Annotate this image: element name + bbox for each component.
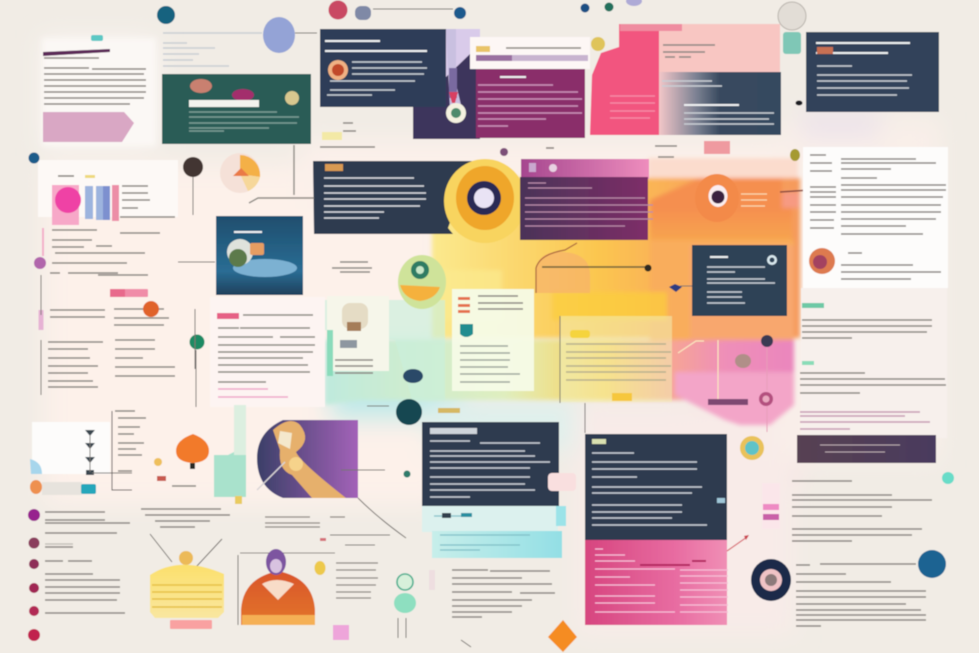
icon: small dark node xyxy=(367,369,460,478)
panel: stacked coins icon xyxy=(778,2,806,54)
panel: navy middle card xyxy=(422,422,576,558)
pink tail xyxy=(675,372,794,425)
icon: orange balloon xyxy=(154,434,209,486)
tab: pale pink xyxy=(548,473,576,491)
node: lavender balloon xyxy=(263,17,295,53)
panel: green card xyxy=(162,74,311,144)
node markers left xyxy=(28,152,203,269)
icon: orange diamond xyxy=(548,620,577,652)
panel: large left-hand chart card xyxy=(38,160,178,256)
panel: navy lower card xyxy=(585,434,749,625)
bar chart xyxy=(85,186,109,220)
icon: ringed teal node xyxy=(708,335,773,460)
arrow: pointer xyxy=(669,284,682,292)
bullet list markers xyxy=(28,509,40,641)
low gradient band xyxy=(325,340,794,405)
icon: pie chart xyxy=(220,153,260,193)
panel: warm gradient area xyxy=(325,158,800,425)
icon: colored blob xyxy=(809,248,835,274)
panel: dark speech card xyxy=(313,161,472,234)
panel: lower-right text column xyxy=(797,288,947,463)
yellow patch xyxy=(552,292,667,320)
text lines xyxy=(44,58,146,104)
panel: light pink top xyxy=(659,24,780,72)
icon: dome and arrow xyxy=(536,243,652,293)
panel: purple gradient card xyxy=(520,159,653,240)
panel: pink lower card xyxy=(585,540,727,625)
connector lines xyxy=(678,340,718,400)
text lines xyxy=(500,76,526,78)
panel: person with orange body xyxy=(238,549,335,625)
panel: teal band xyxy=(422,506,558,532)
bottom-left text list xyxy=(45,512,130,613)
panel: pink block xyxy=(590,24,781,135)
dot xyxy=(796,100,802,106)
tag: pink label xyxy=(500,141,730,157)
panel: lower-right note xyxy=(762,481,932,541)
heading bar xyxy=(43,49,110,56)
text lines xyxy=(325,41,427,51)
shape: mint bar xyxy=(214,405,246,504)
badge: teal tag xyxy=(91,35,103,41)
panel: funnel list xyxy=(30,411,146,495)
panel: pink-edged article xyxy=(210,297,325,407)
panel: mint wash with centre cards xyxy=(324,289,672,433)
pink arrow banner xyxy=(43,112,134,142)
panel: centre-top note xyxy=(163,17,317,66)
panel: top-left text card xyxy=(42,35,156,146)
panel: navy small card xyxy=(669,245,787,316)
panel: yellow stack xyxy=(141,509,230,629)
icon: green round node xyxy=(332,255,446,309)
icon: ring xyxy=(446,103,466,123)
panel: navy right card xyxy=(796,32,939,112)
panel: left text column xyxy=(41,263,204,407)
icon: orange eye xyxy=(695,174,810,222)
lavender strip xyxy=(446,29,480,139)
panel: navy fade xyxy=(659,72,781,135)
icon: teal dot xyxy=(942,472,954,484)
icon: target yellow xyxy=(444,159,526,243)
icon: yellow cluster xyxy=(591,37,605,51)
panel: blue image xyxy=(178,216,303,295)
card: mint note xyxy=(327,296,389,371)
arrow: red xyxy=(727,537,747,551)
icon: bowl xyxy=(190,79,212,93)
icon: orange disc xyxy=(328,60,348,80)
icon: olive dot xyxy=(790,149,800,161)
panel: white text card right xyxy=(803,147,948,288)
panel: navy violet card xyxy=(320,29,480,139)
icon: pink blob xyxy=(52,185,79,225)
panel: bottom mid text xyxy=(452,570,577,652)
panel: magenta card xyxy=(470,37,605,138)
text lines xyxy=(189,112,299,131)
icon: mint nodes xyxy=(394,574,471,647)
tag: pink xyxy=(110,289,148,297)
panel: violet image xyxy=(257,420,385,498)
panel: bottom centre notes xyxy=(265,498,435,640)
card: white middle xyxy=(452,289,534,391)
panel: bottom-right text with target xyxy=(751,550,946,626)
card: yellow middle xyxy=(560,316,672,402)
connector: vertical with arrow xyxy=(249,145,314,203)
text lines xyxy=(663,45,715,57)
dark bar xyxy=(797,435,936,463)
panel: small note below navy xyxy=(320,123,375,147)
circle markers top xyxy=(157,0,642,24)
